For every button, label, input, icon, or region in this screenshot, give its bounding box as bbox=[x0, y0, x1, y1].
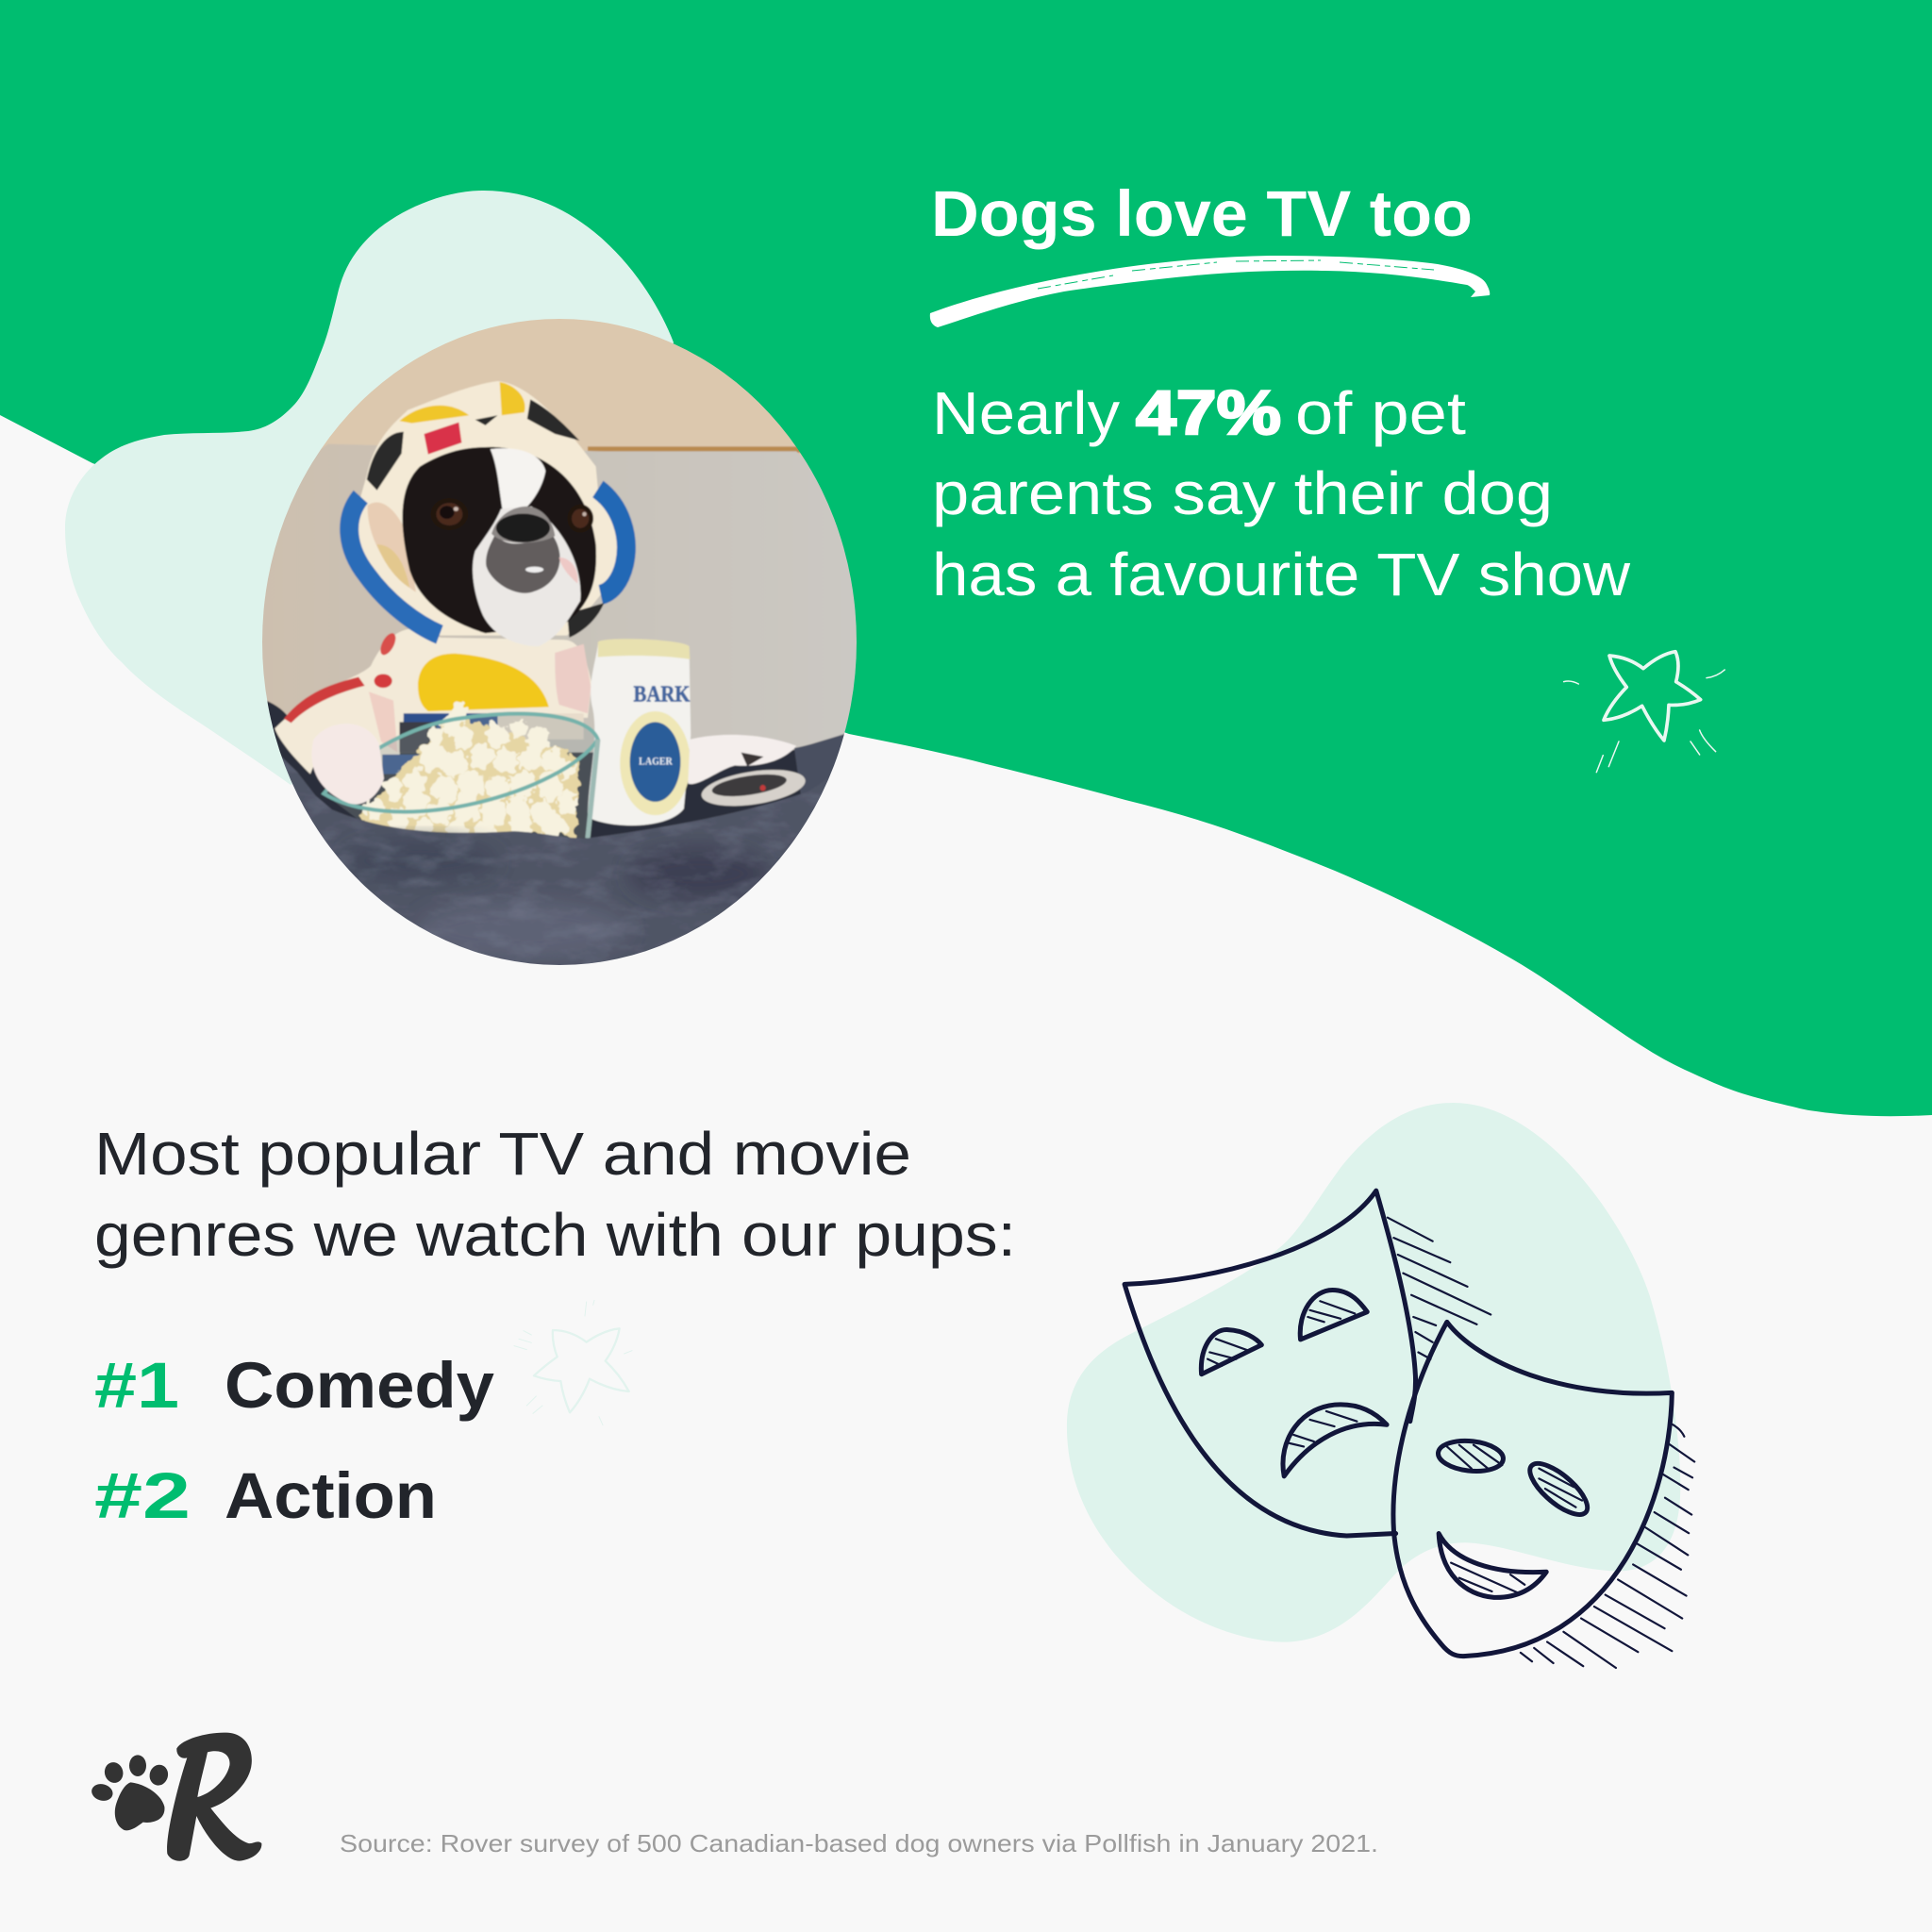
beer can toy: LAGER bbox=[639, 756, 673, 768]
wooden ledge bbox=[588, 446, 801, 453]
stat text: 47%: parents say their dog bbox=[932, 459, 1553, 527]
heading: most popular genres: genres we watch with our pups: bbox=[94, 1201, 1016, 1269]
paw print bbox=[90, 1755, 171, 1830]
blanket front bbox=[281, 757, 822, 965]
stat text: 47%: has a favourite TV show bbox=[932, 541, 1631, 608]
stat text: 47%: of pet bbox=[1295, 379, 1466, 447]
ranking: #1 Comedy bbox=[94, 1349, 494, 1422]
green header wave bbox=[0, 0, 1932, 1116]
dog head bbox=[403, 447, 596, 646]
beer can toy bbox=[588, 639, 691, 825]
remote control bbox=[700, 768, 807, 808]
sad mask bbox=[1124, 1191, 1491, 1536]
right paw bbox=[688, 735, 796, 784]
ranking: #1 Comedy: #1 bbox=[94, 1349, 179, 1422]
sofa cushion bbox=[252, 444, 866, 770]
stat text: 47%: Nearly bbox=[932, 379, 1120, 447]
heading: Dogs love TV too: Dogs love TV too bbox=[931, 177, 1473, 250]
stat text: 47% bbox=[932, 377, 1631, 608]
heading: most popular genres: Most popular TV and movie bbox=[94, 1120, 911, 1188]
ranking: #1 Comedy: Comedy bbox=[225, 1349, 494, 1422]
brush underline bbox=[930, 256, 1490, 327]
hood bbox=[349, 381, 626, 638]
happy mask bbox=[1393, 1322, 1694, 1668]
icon: white star doodle bbox=[1564, 652, 1724, 773]
hoodie body bbox=[275, 628, 591, 776]
logo: Rover paw and R bbox=[90, 1733, 261, 1861]
source note: Source: Rover survey of 500 Canadian-based dog owners via Pollfish in January 2021. bbox=[340, 1829, 1378, 1857]
beer can toy: BARK bbox=[634, 682, 690, 708]
icon: theatre masks bbox=[1124, 1191, 1694, 1668]
ranking: #2 Action: #2 bbox=[94, 1459, 191, 1532]
ranking: #2 Action bbox=[94, 1459, 437, 1532]
right blanket fold bbox=[794, 735, 843, 794]
heading: most popular genres bbox=[94, 1120, 1016, 1269]
pale blob behind photo bbox=[65, 191, 674, 785]
bowl of popcorn bbox=[324, 702, 598, 841]
pale blob behind masks bbox=[1067, 1103, 1680, 1642]
icon: faint star doodle bbox=[514, 1300, 632, 1425]
ranking: #2 Action: Action bbox=[225, 1459, 437, 1532]
photo: dog in hoodie with popcorn bbox=[262, 319, 857, 965]
letter R shape bbox=[167, 1733, 261, 1861]
stat text: 47%: 47% bbox=[1136, 377, 1281, 447]
left paw bbox=[311, 724, 384, 805]
blanket back bbox=[267, 700, 802, 840]
wall bbox=[319, 319, 807, 462]
popcorn kernels bbox=[365, 702, 578, 841]
